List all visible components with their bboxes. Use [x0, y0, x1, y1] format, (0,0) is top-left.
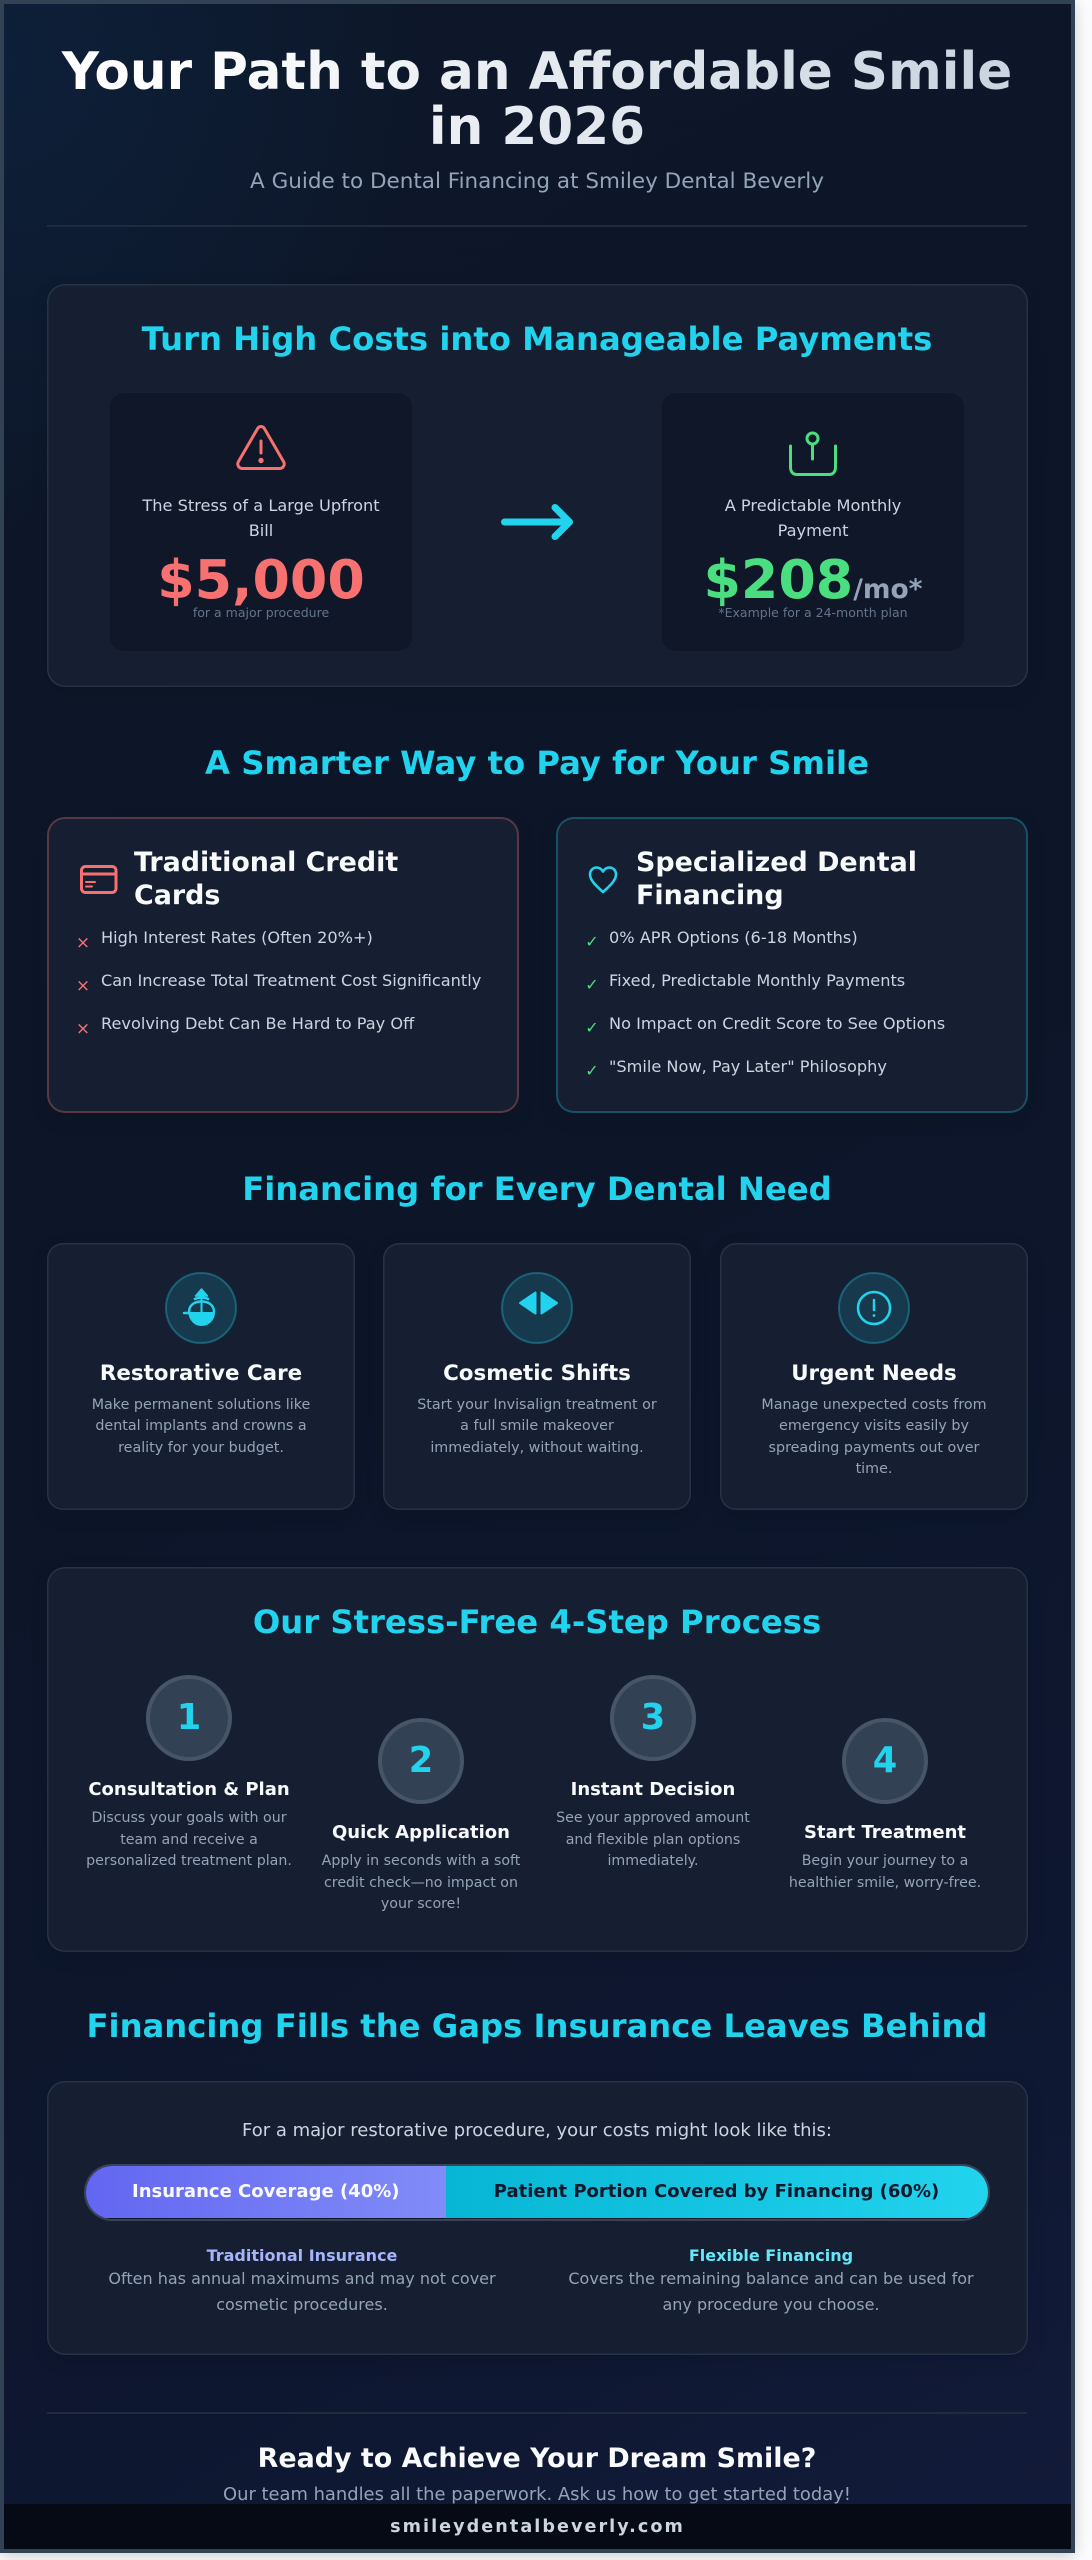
card title: Financing [636, 880, 784, 910]
description: spreading payments out over [769, 1440, 979, 1456]
box: monthly payment [662, 393, 964, 651]
panel: specialized dental financing [556, 817, 1028, 1113]
step 2: Quick Application [332, 1822, 510, 1842]
list item: 0% APR Options (6-18 Months) [609, 928, 858, 947]
note: insurance [108, 2246, 496, 2314]
box: upfront bill [110, 393, 412, 651]
list item: × [76, 933, 90, 953]
step 4: 4 [873, 1740, 897, 1781]
bar segment: financing: Patient Portion Covered by Financing (60%) [494, 2181, 939, 2202]
arrow [501, 504, 573, 540]
list item: ✓ [585, 932, 599, 951]
intro text: For a major restorative procedure, your costs might look like this: [242, 2120, 832, 2141]
heading: a smarter way: A Smarter Way to Pay for Your Smile [205, 744, 869, 782]
description: time. [856, 1461, 892, 1477]
subtitle: A Guide to Dental Financing at Smiley Dental Beverly [250, 169, 824, 194]
panel: turn high costs into manageable payments [47, 284, 1028, 687]
step 2: Apply in seconds with a soft [322, 1853, 520, 1869]
panel: traditional credit cards [47, 817, 519, 1113]
description [92, 1396, 310, 1456]
description: reality for your budget. [118, 1440, 284, 1456]
description: Manage unexpected costs from [761, 1396, 987, 1412]
step 3: 3 [641, 1697, 665, 1738]
label [142, 496, 380, 540]
step 4: Start Treatment [804, 1822, 966, 1842]
step 1 [86, 1675, 292, 1869]
title: Your Path to an Affordable Smile [62, 42, 1012, 102]
panel: cosmetic shifts [383, 1243, 691, 1510]
list item: Fixed, Predictable Monthly Payments [609, 971, 905, 990]
label: Payment [778, 521, 848, 540]
bar segment: financing [446, 2166, 988, 2218]
step 1: 1 [177, 1697, 201, 1738]
description: Start your Invisalign treatment or [417, 1396, 657, 1412]
description: Make permanent solutions like [92, 1396, 310, 1412]
description: immediately, without waiting. [430, 1440, 644, 1456]
list item: ✓ [585, 1018, 599, 1037]
call to action text: Our team handles all the paperwork. Ask us how to get started today! [223, 2484, 851, 2505]
label [724, 496, 901, 540]
icon: restorative [165, 1272, 237, 1344]
panel: insurance vs financing [47, 2081, 1028, 2355]
title [47, 44, 1027, 156]
step 2: 2 [409, 1740, 433, 1781]
list item: Can Increase Total Treatment Cost Significantly [101, 971, 481, 990]
card title: Cards [134, 880, 220, 910]
panel: urgent needs [720, 1243, 1028, 1510]
card title: Cosmetic Shifts [443, 1360, 631, 1386]
heading: Turn High Costs into Manageable Payments [142, 320, 932, 358]
step 3: immediately. [607, 1853, 699, 1869]
description: emergency visits easily by [779, 1418, 969, 1434]
step 2 [322, 1718, 520, 1912]
card title: Restorative Care [100, 1360, 302, 1386]
note: financing: Covers the remaining balance and can be used for [568, 2269, 974, 2288]
list item: "Smile Now, Pay Later" Philosophy [609, 1057, 887, 1076]
step 4: healthier smile, worry-free. [789, 1875, 981, 1891]
step 2: your score! [381, 1896, 461, 1912]
step 1: personalized treatment plan. [86, 1853, 292, 1869]
note: financing: any procedure you choose. [662, 2295, 880, 2314]
description: a full smile makeover [460, 1418, 614, 1434]
amount: $5,000 [157, 548, 365, 611]
label: A Predictable Monthly [725, 496, 901, 515]
list item: High Interest Rates (Often 20%+) [101, 928, 373, 947]
list item: ✓ [585, 1061, 599, 1080]
note: financing: Flexible Financing [689, 2246, 853, 2265]
note: insurance: Often has annual maximums and may not cover [108, 2269, 496, 2288]
heading: financing for every need: Financing for Every Dental Need [242, 1170, 832, 1208]
step 1: Consultation & Plan [88, 1778, 290, 1800]
call to action heading: Ready to Achieve Your Dream Smile? [258, 2443, 816, 2474]
bar segment: insurance: Insurance Coverage (40%) [132, 2181, 399, 2202]
card title [134, 847, 398, 910]
bar segment: insurance [86, 2166, 446, 2218]
stacked bar [84, 2164, 990, 2221]
step 3: Instant Decision [571, 1778, 735, 1800]
icon: credit card [80, 865, 118, 894]
icon: tray with pin [789, 432, 837, 476]
list item: ✓ [585, 975, 599, 994]
list item [76, 928, 481, 1039]
heading: Our Stress-Free 4-Step Process [253, 1603, 821, 1641]
card title: Urgent Needs [791, 1360, 957, 1386]
step 3: See your approved amount [556, 1810, 750, 1826]
heading: financing fills the gaps: Financing Fills the Gaps Insurance Leaves Behind [86, 2007, 988, 2045]
description: dental implants and crowns a [95, 1418, 307, 1434]
list item: × [76, 976, 90, 996]
footer [4, 2504, 1071, 2549]
step 4: Begin your journey to a [802, 1853, 968, 1869]
website: smileydentalbeverly.com [390, 2517, 685, 2537]
step 1: Discuss your goals with our [91, 1810, 287, 1826]
card title: Specialized Dental [636, 847, 917, 878]
step 2: credit check—no impact on [324, 1875, 518, 1891]
list item: × [76, 1019, 90, 1039]
note: for a major procedure [193, 605, 329, 620]
list item: No Impact on Credit Score to See Options [609, 1014, 945, 1033]
note: insurance: cosmetic procedures. [216, 2295, 388, 2314]
icon: warning triangle [236, 425, 286, 470]
label: Bill [249, 521, 273, 540]
step 4 [789, 1718, 981, 1891]
card title [636, 847, 917, 910]
title: in 2026 [429, 97, 645, 157]
icon: urgent [838, 1272, 910, 1344]
description [761, 1396, 987, 1477]
icon: heart [588, 866, 618, 894]
description [417, 1396, 657, 1456]
note: *Example for a 24-month plan [718, 605, 908, 620]
note: insurance: Traditional Insurance [207, 2246, 397, 2265]
icon: cosmetic [501, 1272, 573, 1344]
panel: restorative care [47, 1243, 355, 1510]
step 3 [556, 1675, 750, 1869]
list item [585, 928, 945, 1080]
list item: Revolving Debt Can Be Hard to Pay Off [101, 1014, 414, 1033]
step 1: team and receive a [120, 1832, 258, 1848]
panel: 4-step process [47, 1567, 1028, 1952]
step 3: and flexible plan options [566, 1832, 740, 1848]
note: financing [568, 2246, 974, 2314]
card title: Traditional Credit [134, 847, 398, 878]
amount: $208/mo* [703, 548, 923, 611]
label: The Stress of a Large Upfront [142, 496, 380, 515]
